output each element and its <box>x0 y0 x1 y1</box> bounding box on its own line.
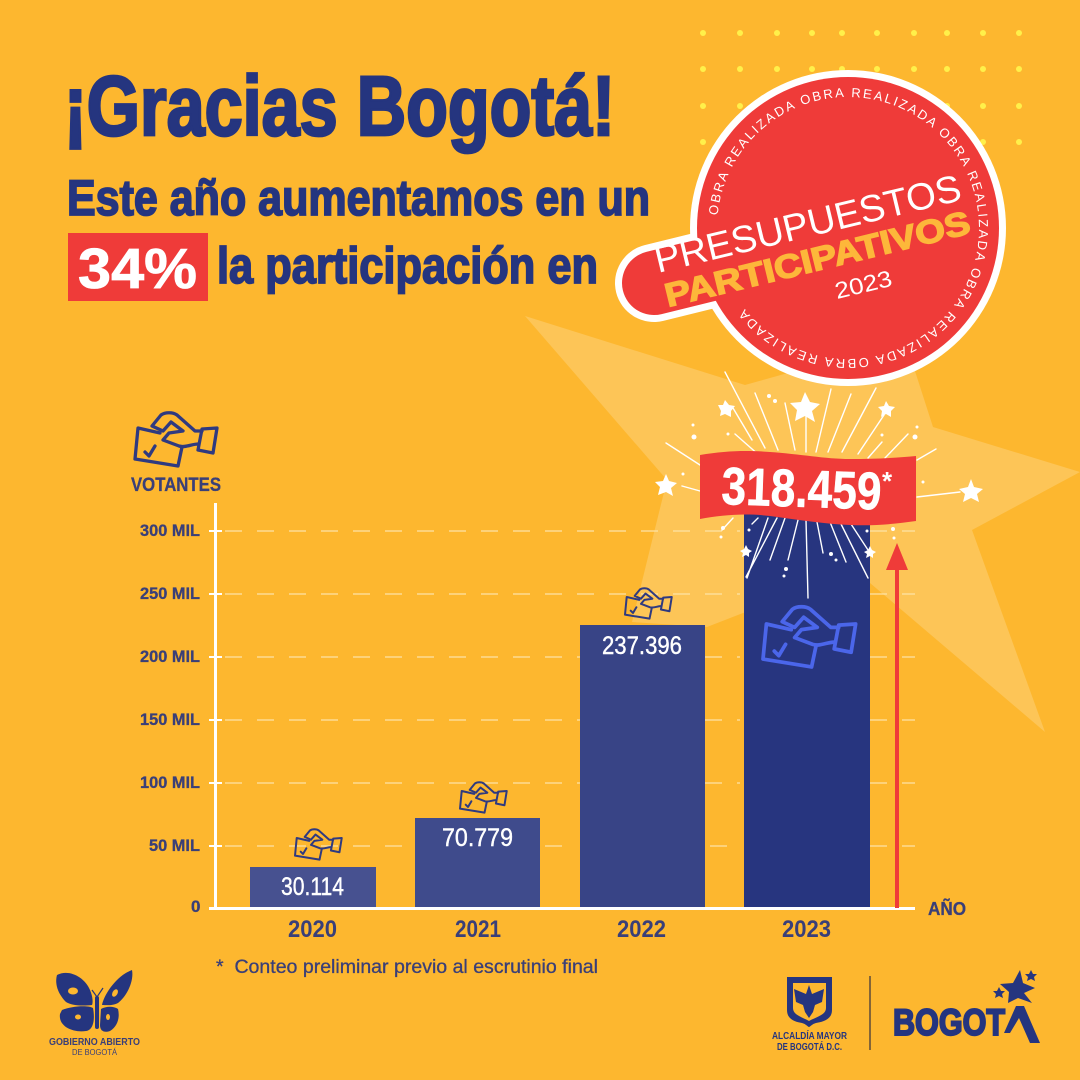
y-axis title: VOTANTES <box>131 474 221 496</box>
year labels: 2022 <box>617 916 666 943</box>
icon: ballot 2023 <box>763 607 856 667</box>
year labels <box>288 916 831 943</box>
badge ring text: OBRA REALIZADA OBRA REALIZADA OBRA REALIZADA OBRA REALIZADA OBRA REALIZADA <box>709 88 988 368</box>
logo: alcaldía mayor: DE BOGOTÁ D.C. <box>777 1040 842 1053</box>
badge heading: PRESUPUESTOS <box>650 168 965 282</box>
logo divider <box>869 976 871 1050</box>
footnote: * Conteo preliminar previo al escrutinio final <box>216 957 598 978</box>
star 7 <box>864 546 876 558</box>
logo: gobierno abierto: DE BOGOTÁ <box>72 1047 117 1057</box>
arrow <box>886 543 908 908</box>
icon: ballot 2020 <box>295 829 342 860</box>
highlight: 34%: 34% <box>78 237 197 301</box>
bar chart <box>140 503 966 943</box>
butterfly <box>56 970 132 1032</box>
value labels: 237.396 <box>602 632 682 660</box>
badge year: 2023 <box>832 265 895 304</box>
y-axis labels: 50 MIL <box>149 836 200 855</box>
dot grid <box>700 30 1022 145</box>
year labels: 2020 <box>288 916 337 943</box>
bar 2022 <box>580 625 705 908</box>
votantes icon <box>135 413 217 466</box>
y-axis labels: 150 MIL <box>140 710 200 729</box>
x-axis title: AÑO <box>928 898 966 919</box>
star 5 <box>959 479 983 502</box>
bar 2020 <box>250 867 376 908</box>
logo: alcaldía mayor: ALCALDÍA MAYOR <box>772 1029 848 1042</box>
banner: 318.459: 318.459 <box>721 457 883 522</box>
logo: gobierno abierto <box>49 970 140 1057</box>
subtitle line 2: la participación en <box>217 237 598 294</box>
y-axis labels <box>140 521 200 916</box>
fireworks <box>655 372 983 598</box>
bar 2021 <box>415 818 540 908</box>
y-axis labels: 200 MIL <box>140 647 200 666</box>
logo text: GOBIERNO ABIERTO <box>49 1036 140 1048</box>
logo: alcaldía mayor <box>772 977 848 1053</box>
value labels <box>281 632 682 901</box>
year labels: 2023 <box>782 916 831 943</box>
value labels: 30.114 <box>281 873 344 901</box>
bar 2023 <box>744 510 870 908</box>
star 6 <box>740 545 752 557</box>
y-axis labels: 100 MIL <box>140 773 200 792</box>
logo: bogotá: BOGOT <box>893 1002 1005 1043</box>
star 4 <box>655 474 677 496</box>
y-axis labels: 250 MIL <box>140 584 200 603</box>
y-axis labels: 300 MIL <box>140 521 200 540</box>
logo: bogotá <box>893 970 1040 1043</box>
y-axis labels: 0 <box>191 897 200 916</box>
subtitle line 1: Este año aumentamos en un <box>67 170 650 226</box>
value labels: 70.779 <box>442 824 513 852</box>
decorative star <box>525 316 1080 732</box>
year labels: 2021 <box>455 916 501 943</box>
badge: presupuestos participativos <box>615 70 1006 386</box>
star 1 <box>790 392 820 422</box>
banner: 318.459: * <box>882 466 893 496</box>
badge subheading: PARTICIPATIVOS <box>661 204 974 314</box>
axes <box>209 503 915 910</box>
icon: ballot 2021 <box>460 782 507 813</box>
shield <box>787 977 832 1027</box>
star 3 <box>878 401 895 417</box>
icon: ballot 2022 <box>625 588 672 619</box>
star 2 <box>718 400 735 417</box>
title: ¡Gracias Bogotá! <box>64 59 615 153</box>
